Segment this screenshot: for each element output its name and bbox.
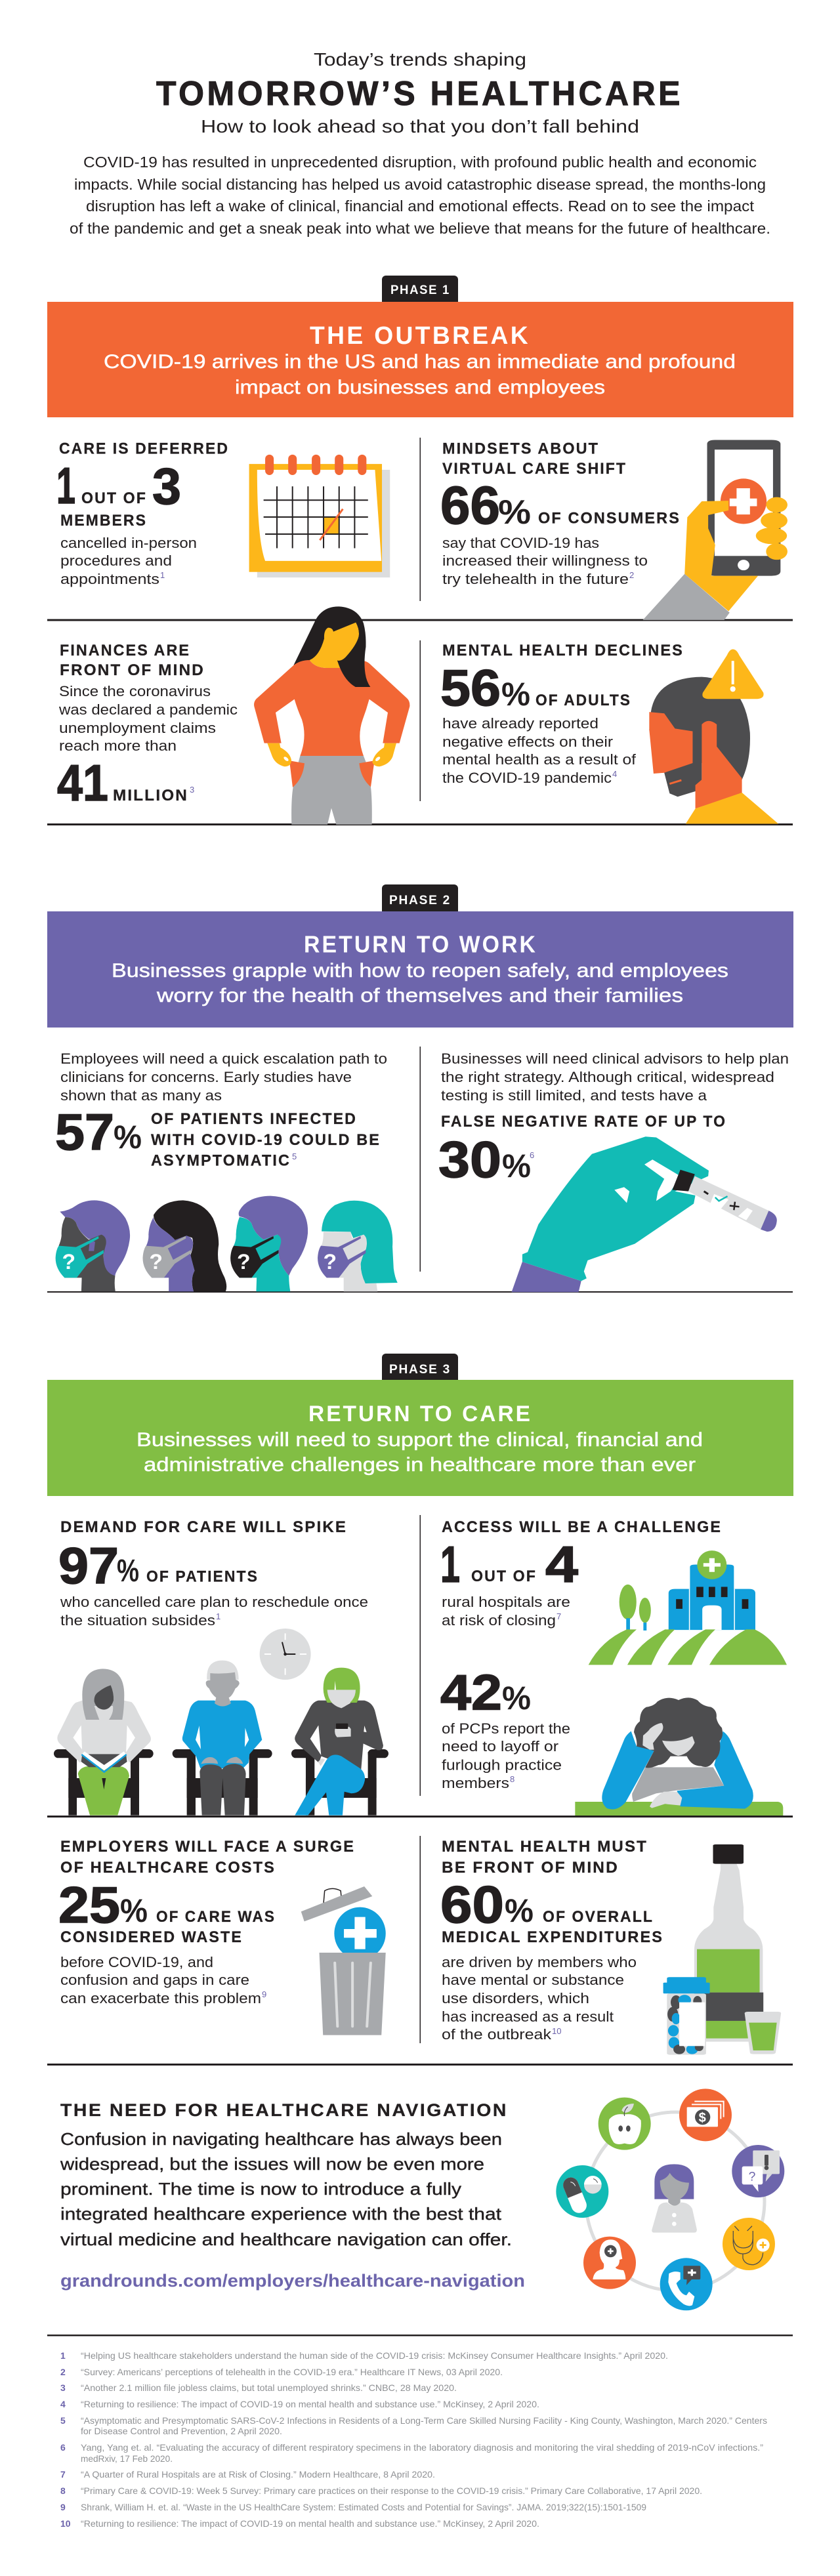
illustration: masked heads [56,1196,398,1291]
panel: the need for healthcare navigation: integrated healthcare experience with the best that [60,2204,502,2224]
panel: mindsets about virtual care shift: 66 [440,476,500,535]
header: title block [70,49,770,237]
intro text [70,154,770,237]
panel: care is deferred: 1 [160,570,165,580]
panel: false negative rate [438,1050,789,1292]
icon: trash can with medical cross [301,1886,386,2035]
kicker: Today’s trends shaping [314,49,526,70]
icon: clock [260,1629,311,1680]
panel: mental health must be front of mind: OF OVERALL [543,1908,654,1926]
head 2 [143,1200,226,1291]
panel: mindsets about virtual care shift: VIRTUAL CARE SHIFT [442,460,627,478]
banner: return to work: RETURN TO WORK [304,930,537,958]
banner: the outbreak: THE OUTBREAK [310,322,530,350]
panel: demand for care will spike: OF PATIENTS [146,1568,259,1585]
icon: apple [598,2098,651,2150]
panel: asymptomatic patients: shown that as many as [60,1087,222,1104]
phase 1 badge: PHASE 1 [390,283,450,297]
panel: mental health must be front of mind: BE FRONT OF MIND [442,1859,619,1877]
icon: speech bubbles: ? [749,2170,756,2184]
panel: mental health must be front of mind: use disorders, which [442,1990,589,2006]
panel: asymptomatic patients: ASYMPTOMATIC [151,1152,291,1169]
icon: speech bubbles [732,2145,784,2197]
panel: asymptomatic patients: % [114,1119,142,1155]
panel: employers will face a surge: OF HEALTHCARE COSTS [60,1859,276,1877]
references list: 5 [60,2415,66,2426]
banner: return to work: worry for the health of themselves and their families [156,985,683,1007]
references list [60,2350,767,2529]
banner: return to work [47,911,793,1028]
panel: asymptomatic patients: Employees will need a quick escalation path to [60,1050,387,1067]
illustration: bottle, pills and glass [663,1844,781,2055]
diagram: navigation ring [556,2088,784,2310]
panel: the need for healthcare navigation [60,2088,784,2310]
icon: calendar [249,455,390,577]
panel: asymptomatic patients: WITH COVID-19 COULD BE [151,1131,381,1149]
panel: care is deferred: procedures and [60,552,172,569]
references list: 7 [60,2469,66,2480]
rule above references [47,2335,793,2336]
panel: demand for care will spike: DEMAND FOR CARE WILL SPIKE [60,1518,347,1536]
head 4 [318,1201,398,1291]
references list: 6 [60,2442,66,2453]
intro text: COVID-19 has resulted in unprecedented disruption, with profound public health and economic [83,154,757,171]
icon: head with cross [583,2237,636,2289]
panel: employers will face a surge: EMPLOYERS WILL FACE A SURGE [60,1838,355,1856]
panel: false negative rate: Businesses will need clinical advisors to help plan [441,1050,789,1067]
panel: employers will face a surge: CONSIDERED WASTE [60,1928,243,1946]
illustration: head with alert sign [649,650,778,824]
panel: care is deferred: appointments [60,571,159,587]
panel: employers will face a surge [58,1838,386,2035]
rule line under upper phase 3 row [47,1816,793,1818]
panel: care is deferred: OUT OF [81,489,147,507]
panel: mental health must be front of mind [440,1838,781,2055]
panel: finances are front of mind: unemployment claims [59,720,216,736]
title: TOMORROW’S HEALTHCARE [156,75,683,113]
phase 3 badge [382,1354,458,1380]
panel: asymptomatic patients: 57 [55,1103,114,1161]
panel: false negative rate: the right strategy. Although critical, widespread [441,1069,774,1085]
panel: access will be a challenge [440,1518,787,1817]
panel: mental health declines [440,642,778,824]
phase 2 badge: PHASE 2 [389,894,451,907]
banner: return to care [47,1380,793,1496]
panel: finances are front of mind: was declared a pandemic [58,701,238,718]
person with phone [295,1668,383,1816]
intro text: impacts. While social distancing has helped us avoid catastrophic disease spread, the months-long [74,176,766,193]
panel: the need for healthcare navigation: widespread, but the issues will now be even more [60,2154,484,2174]
panel: finances are front of mind: Since the coronavirus [59,683,211,699]
panel: access will be a challenge: 42 [440,1665,502,1720]
panel: mental health must be front of mind: are driven by members who [442,1954,637,1970]
panel: care is deferred: 1 [56,457,75,514]
panel: mental health must be front of mind: % [505,1892,534,1929]
references list: “Survey: Americans’ perceptions of telehealth in the COVID-19 era.” Healthcare IT News, 03 April 2020. [81,2367,503,2377]
panel: demand for care will spike: the situation subsides [60,1612,215,1629]
navigator figure [652,2164,697,2233]
panel: mental health must be front of mind: of the outbreak [442,2026,552,2043]
panel: employers will face a surge: confusion and gaps in care [60,1972,249,1988]
banner: the outbreak: impact on businesses and employees [235,377,605,398]
panel: mental health must be front of mind: MENTAL HEALTH MUST [442,1838,648,1856]
panel: access will be a challenge: furlough practice [442,1757,562,1773]
rule lines and dividers, phase 3 [47,1515,793,2066]
panel: mental health declines: mental health as a result of [442,751,637,768]
panel: care is deferred: MEMBERS [60,512,147,530]
panel: mindsets about virtual care shift [440,440,788,620]
panel: finances are front of mind: FINANCES ARE [60,642,190,659]
panel: mental health must be front of mind: MEDICAL EXPENDITURES [442,1928,663,1946]
references list: 1 [60,2350,66,2361]
head 3 [230,1196,308,1291]
banner: return to care: RETURN TO CARE [308,1402,532,1426]
panel: access will be a challenge: 1 [440,1535,460,1593]
panel: mental health declines: % [501,676,530,713]
phase 2 badge [382,884,458,911]
panel: mental health declines: MENTAL HEALTH DECLINES [442,642,684,659]
illustration: waiting room [54,1629,388,1816]
panel: mindsets about virtual care shift: say that COVID-19 has [442,535,599,551]
head 1 [56,1200,130,1291]
banner: return to care: Businesses will need to support the clinical, financial and [136,1429,703,1451]
panel: employers will face a surge: can exacerbate this problem [60,1990,261,2006]
illustration: green hills [589,1629,787,1665]
panel: mental health declines: 4 [612,769,617,779]
panel: care is deferred: CARE IS DEFERRED [59,440,229,458]
panel: demand for care will spike: 1 [216,1611,220,1621]
references list: “Helping US healthcare stakeholders understand the human side of the COVID-19 crisis: McKinsey Consumer Healthcare Insights.” April 2020. [81,2350,668,2361]
panel: asymptomatic patients: OF PATIENTS INFECTED [151,1110,357,1128]
illustration: stressed worker at desk [575,1697,783,1817]
panel: false negative rate: 6 [530,1150,534,1160]
panel: mental health declines: have already reported [442,715,598,732]
intro text: of the pandemic and get a sneak peak into what we believe that means for the future of healthcare. [70,220,770,237]
references list: “Returning to resilience: The impact of COVID-19 on mental health and substance use.” McKinsey, 2 April 2020. [81,2518,539,2529]
references list: 8 [60,2485,66,2496]
panel: finances are front of mind: FRONT OF MIND [60,661,205,679]
panel: demand for care will spike [54,1518,388,1816]
references list: medRxiv, 17 Feb 2020. [81,2453,173,2464]
panel: mental health declines: 56 [440,659,501,717]
panel: finances are front of mind: 3 [190,785,194,795]
banner: return to care: administrative challenges in healthcare more than ever [144,1454,696,1476]
references list: “Primary Care & COVID-19: Week 5 Survey: Primary care practices on their response to the COVID-19 crisis.” Primary Care Collaborative, 17 April 2020. [81,2485,702,2496]
intro text: disruption has left a wake of clinical, financial and emotional effects. Read on to see the impact [86,197,754,215]
panel: asymptomatic patients: 5 [292,1152,297,1161]
panel: mental health must be front of mind: 60 [440,1875,504,1934]
illustration: rural hospital [620,1550,755,1631]
panel: mental health declines: the COVID-19 pandemic [442,770,612,786]
panel: demand for care will spike: 97 [58,1537,119,1594]
link: grandrounds.com/employers/healthcare-navigation [60,2271,525,2291]
person in blue [182,1661,262,1816]
icon: hand holding phone [643,440,788,620]
panel: access will be a challenge: 7 [556,1611,561,1621]
icon: money [679,2088,732,2141]
references list: 2 [60,2367,66,2377]
panel: mental health declines: OF ADULTS [536,692,631,709]
panel: access will be a challenge: of PCPs report the [442,1720,570,1737]
references list: “A Quarter of Rural Hospitals are at Risk of Closing.” Modern Healthcare, 8 April 2020. [81,2469,435,2480]
icon: pills [556,2165,608,2218]
subtitle: How to look ahead so that you don’t fall behind [201,116,639,136]
head 1: ? [62,1250,77,1274]
panel: mental health must be front of mind: 10 [552,2026,561,2036]
icon: money: $ [699,2111,706,2125]
references list: for Disease Control and Prevention, 2 April 2020. [81,2426,282,2436]
panel: false negative rate: FALSE NEGATIVE RATE OF UP TO [441,1113,726,1131]
panel: care is deferred: cancelled in-person [60,535,197,551]
rule lines and dividers, phase 1 [47,438,793,825]
panel: employers will face a surge: 25 [58,1876,120,1934]
person reading [57,1669,151,1816]
panel: employers will face a surge: before COVID-19, and [60,1954,213,1970]
phase 1 badge [382,276,458,302]
panel: access will be a challenge: % [502,1680,531,1716]
panel: false negative rate: % [502,1148,531,1184]
panel: access will be a challenge: OUT OF [471,1568,537,1585]
illustration: gloved hand with test tube [512,1136,777,1292]
head 3: ? [237,1250,253,1274]
panel: access will be a challenge: at risk of closing [442,1612,556,1629]
icon: phone call [660,2258,713,2310]
panel: asymptomatic patients [55,1050,398,1291]
panel: mindsets about virtual care shift: % [498,493,531,531]
panel: demand for care will spike: % [117,1554,139,1589]
panel: mindsets about virtual care shift: 2 [629,570,634,580]
chairs [54,1749,388,1816]
panel: mindsets about virtual care shift: MINDSETS ABOUT [442,440,599,458]
phase 3 badge: PHASE 3 [389,1363,451,1377]
banner: return to work: Businesses grapple with how to reopen safely, and employees [112,960,728,982]
panel: finances are front of mind: reach more than [59,737,177,754]
icon: stethoscope [723,2218,775,2270]
panel: mindsets about virtual care shift: increased their willingness to [442,552,648,569]
panel: finances are front of mind: 41 [57,754,108,812]
references list: 9 [60,2502,66,2512]
panel: care is deferred [56,440,390,587]
references list: 4 [60,2399,66,2409]
panel: asymptomatic patients: clinicians for concerns. Early studies have [60,1069,352,1085]
banner: the outbreak [47,302,793,417]
panel: employers will face a surge: 9 [262,1989,266,1999]
panel: employers will face a surge: % [120,1892,148,1929]
panel: the need for healthcare navigation: Confusion in navigating healthcare has always been [60,2129,502,2149]
panel: the need for healthcare navigation: prominent. The time is now to introduce a fully [60,2179,461,2199]
panel: access will be a challenge: need to layoff or [442,1738,558,1755]
references list: 10 [60,2518,71,2529]
panel: employers will face a surge: OF CARE WAS [156,1908,276,1926]
panel: false negative rate: testing is still limited, and tests have a [441,1087,707,1104]
panel: access will be a challenge: rural hospitals are [442,1594,570,1610]
panel: finances are front of mind [57,606,410,825]
references list: “Returning to resilience: The impact of COVID-19 on mental health and substance use.” McKinsey, 2 April 2020. [81,2399,539,2409]
references list: Yang, Yang et. al. “Evaluating the accuracy of different respiratory specimens in the laboratory diagnosis and monitoring the viral shedding of 2019-nCoV infections.” [81,2442,763,2453]
panel: care is deferred: 3 [152,457,181,515]
panel: finances are front of mind: MILLION [113,787,188,804]
head 4: ? [323,1250,339,1274]
panel: demand for care will spike: who cancelled care plan to reschedule once [60,1594,368,1610]
panel: mindsets about virtual care shift: try telehealth in the future [442,571,629,587]
panel: access will be a challenge: ACCESS WILL BE A CHALLENGE [442,1518,722,1536]
panel: access will be a challenge: 8 [510,1774,514,1784]
panel: mental health must be front of mind: have mental or substance [442,1972,624,1988]
rule lines and dividers, phase 2 [47,1047,793,1293]
references list: 3 [60,2382,66,2393]
panel: mindsets about virtual care shift: OF CONSUMERS [538,509,681,528]
panel: mental health must be front of mind: has increased as a result [442,2008,614,2025]
panel: access will be a challenge: 4 [545,1535,578,1593]
panel: false negative rate: 30 [438,1131,501,1188]
illustration: woman with empty pockets [254,606,410,825]
references list: “Another 2.1 million file jobless claims, but total unemployed shrinks.” CNBC, 28 May 2020. [81,2382,457,2393]
panel: the need for healthcare navigation: virtual medicine and healthcare navigation can offer. [60,2230,512,2249]
panel: access will be a challenge: members [442,1775,509,1791]
head 2: ? [149,1250,165,1274]
panel: the need for healthcare navigation: THE NEED FOR HEALTHCARE NAVIGATION [60,2100,508,2120]
banner: the outbreak: COVID-19 arrives in the US and has an immediate and profound [104,351,736,373]
panel: mental health declines: negative effects on their [442,734,613,750]
references list: “Asymptomatic and Presymptomatic SARS-CoV-2 Infections in Residents of a Long-Term Care Skilled Nursing Facility - King County, Washington, March 2020.” Centers [81,2415,767,2426]
references list: Shrank, William H. et. al. “Waste in the US HealthCare System: Estimated Costs and Potential for Savings”. JAMA. 2019;322(15):1501-1509 [81,2502,646,2512]
